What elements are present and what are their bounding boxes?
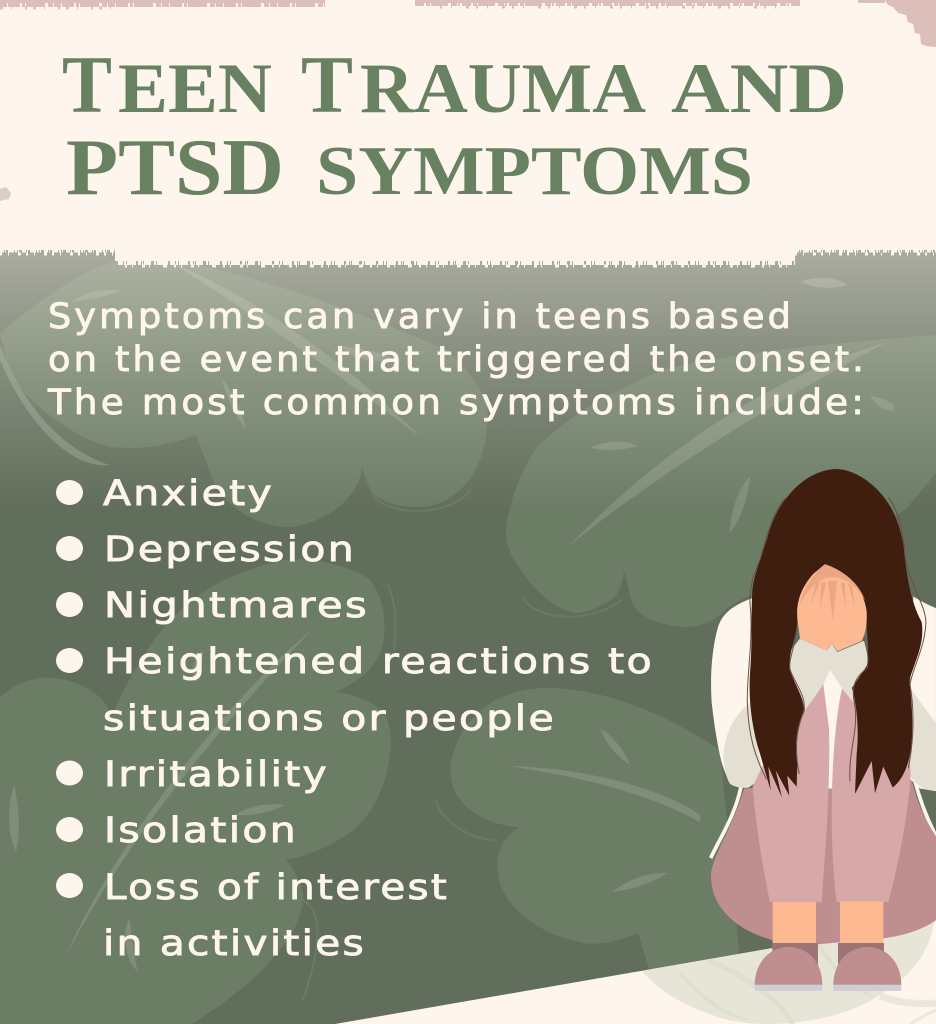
- list items: Irritability: [104, 755, 329, 795]
- socks: [772, 943, 884, 969]
- list items: Loss of interest: [104, 868, 449, 908]
- intro text: Symptoms can vary in teens based: [48, 297, 794, 337]
- illustration: girl covering her face: [711, 469, 936, 991]
- title panel: cream torn paper: [0, 0, 936, 266]
- title: line 2: SYMPTOMS: [316, 133, 753, 210]
- list items: Nightmares: [104, 586, 369, 626]
- title: line 1: T: [62, 39, 112, 130]
- right shoe: [833, 947, 901, 991]
- title: line 1: RAUMA: [360, 50, 646, 128]
- floor: cream wedge with pale leaf: [335, 912, 936, 1024]
- list items: in activities: [103, 924, 366, 964]
- list items: Isolation: [104, 811, 298, 851]
- hair strands: [747, 498, 926, 781]
- torn mark: left edge: [0, 187, 11, 201]
- dress lower body: [711, 779, 936, 944]
- legs: [753, 684, 911, 902]
- collar: [789, 638, 869, 710]
- white shirt centre: [823, 643, 844, 789]
- top fade overlay: [0, 250, 936, 510]
- title: line 1: AND: [671, 50, 847, 128]
- bullets: [56, 480, 83, 898]
- intro text: The most common symptoms include:: [47, 383, 867, 423]
- halo outline behind body: [711, 779, 936, 858]
- background: green panel: [0, 250, 936, 1024]
- sweater sleeves: [711, 596, 936, 791]
- hair: [750, 469, 922, 798]
- list items: [103, 474, 654, 964]
- lower legs: [773, 901, 883, 943]
- left shoe: [755, 947, 822, 991]
- symptom list: [56, 474, 654, 964]
- torn pink edge: top: [0, 0, 936, 47]
- title: line 1: [62, 39, 847, 130]
- intro text: [47, 297, 867, 423]
- leaf veins and leaflets: [0, 253, 894, 972]
- title: line 1: T: [301, 39, 353, 130]
- list items: Depression: [104, 530, 356, 570]
- title: line 2: PTSD: [66, 124, 284, 212]
- hands and face: [797, 564, 867, 651]
- list items: Anxiety: [103, 474, 274, 514]
- background leaves: [0, 255, 936, 1024]
- list items: situations or people: [103, 699, 556, 739]
- title: line 2: [66, 124, 753, 212]
- leaf crescent shadows: [302, 490, 622, 1000]
- list items: Heightened reactions to: [104, 642, 654, 682]
- intro text: on the event that triggered the onset.: [48, 340, 867, 380]
- title: line 1: EEN: [118, 50, 272, 128]
